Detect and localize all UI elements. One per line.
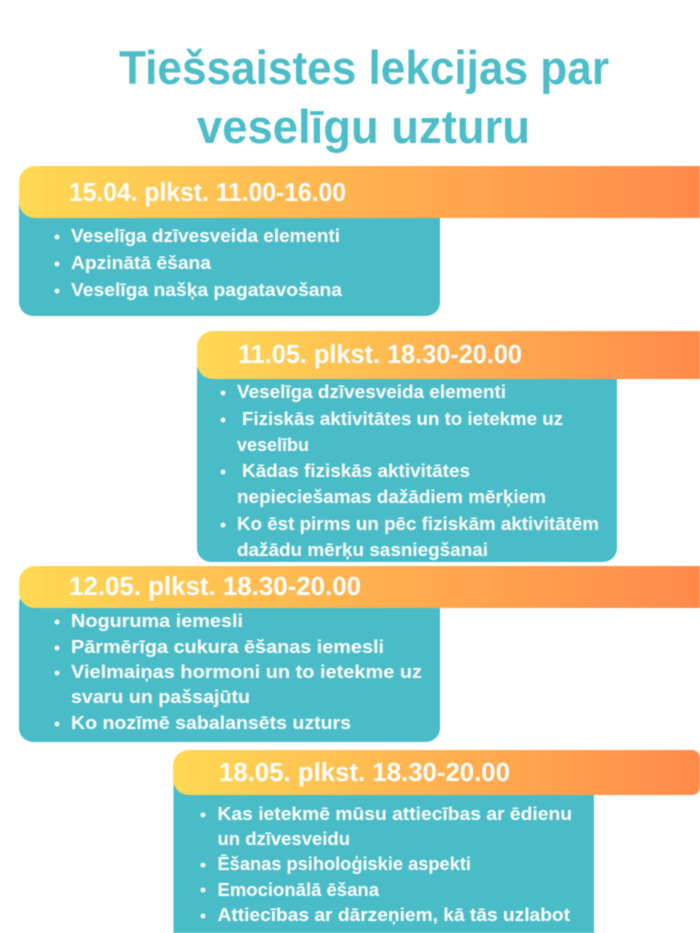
- topic list: 11.05: nepieciešamas dažādiem mērķiem: [237, 487, 546, 507]
- topic list: 12.05: Vielmaiņas hormoni un to ietekme uz: [71, 662, 422, 682]
- topic list: 15.04: Apzinātā ēšana: [71, 253, 212, 273]
- topic list: 15.04: Veselīga našķa pagatavošana: [71, 280, 343, 300]
- banner date text: 11.05: 11.05. plkst. 18.30-20.00: [238, 341, 522, 369]
- panel: lecture 11.05: [197, 331, 700, 562]
- topic list: 11.05: Kādas fiziskās aktivitātes: [242, 461, 470, 481]
- topic list: 11.05: Veselīga dzīvesveida elementi: [237, 382, 506, 402]
- banner date text: 18.05: 18.05. plkst. 18.30-20.00: [219, 759, 510, 787]
- topic list: 15.04: [55, 226, 343, 300]
- title: [119, 41, 609, 153]
- topic list: 18.05: Kas ietekmē mūsu attiecības ar ēdienu: [218, 804, 572, 824]
- topic list: 18.05: [201, 804, 572, 925]
- topic list: 12.05: [55, 611, 422, 733]
- topic list: 18.05: un dzīvesveidu: [218, 829, 350, 849]
- panel: lecture 15.04: [19, 166, 700, 316]
- topic list: 11.05: [221, 382, 599, 560]
- topic list: 12.05: Ko nozīmē sabalansēts uzturs: [71, 713, 351, 733]
- title: Tiešsaistes lekcijas par: [119, 41, 609, 94]
- panel body: lecture 12.05: [19, 590, 440, 742]
- topic list: 18.05: Attiecības ar dārzeņiem, kā tās uzlabot: [218, 905, 570, 925]
- topic list: 11.05: Ko ēst pirms un pēc fiziskām aktivitātēm: [237, 514, 599, 534]
- panel body: lecture 15.04: [19, 190, 440, 316]
- panel body: lecture 11.05: [197, 355, 617, 562]
- title: veselīgu uzturu: [197, 100, 530, 153]
- panel: lecture 12.05: [19, 566, 700, 742]
- panel body: lecture 18.05: [174, 770, 594, 933]
- banner date text: 15.04: 15.04. plkst. 11.00-16.00: [69, 179, 346, 207]
- topic list: 15.04: Veselīga dzīvesveida elementi: [71, 226, 340, 246]
- topic list: 12.05: Pārmērīga cukura ēšanas iemesli: [71, 637, 384, 657]
- topic list: 11.05: dažādu mērķu sasniegšanai: [237, 540, 488, 560]
- topic list: 12.05: svaru un pašsajūtu: [71, 687, 250, 707]
- date banner: 15.04: [19, 166, 700, 218]
- date banner: 18.05: [173, 750, 700, 795]
- topic list: 11.05: Fiziskās aktivitātes un to ietekme uz: [242, 409, 563, 429]
- date banner: 11.05: [197, 331, 700, 379]
- topic list: 18.05: Emocionālā ēšana: [218, 880, 380, 900]
- topic list: 11.05: veselību: [237, 435, 309, 455]
- topic list: 12.05: Noguruma iemesli: [71, 611, 243, 631]
- date banner: 12.05: [19, 566, 700, 608]
- topic list: 18.05: Ēšanas psiholoģiskie aspekti: [218, 854, 471, 874]
- panel: lecture 18.05: [173, 750, 700, 933]
- banner date text: 12.05: 12.05. plkst. 18.30-20.00: [69, 573, 361, 601]
